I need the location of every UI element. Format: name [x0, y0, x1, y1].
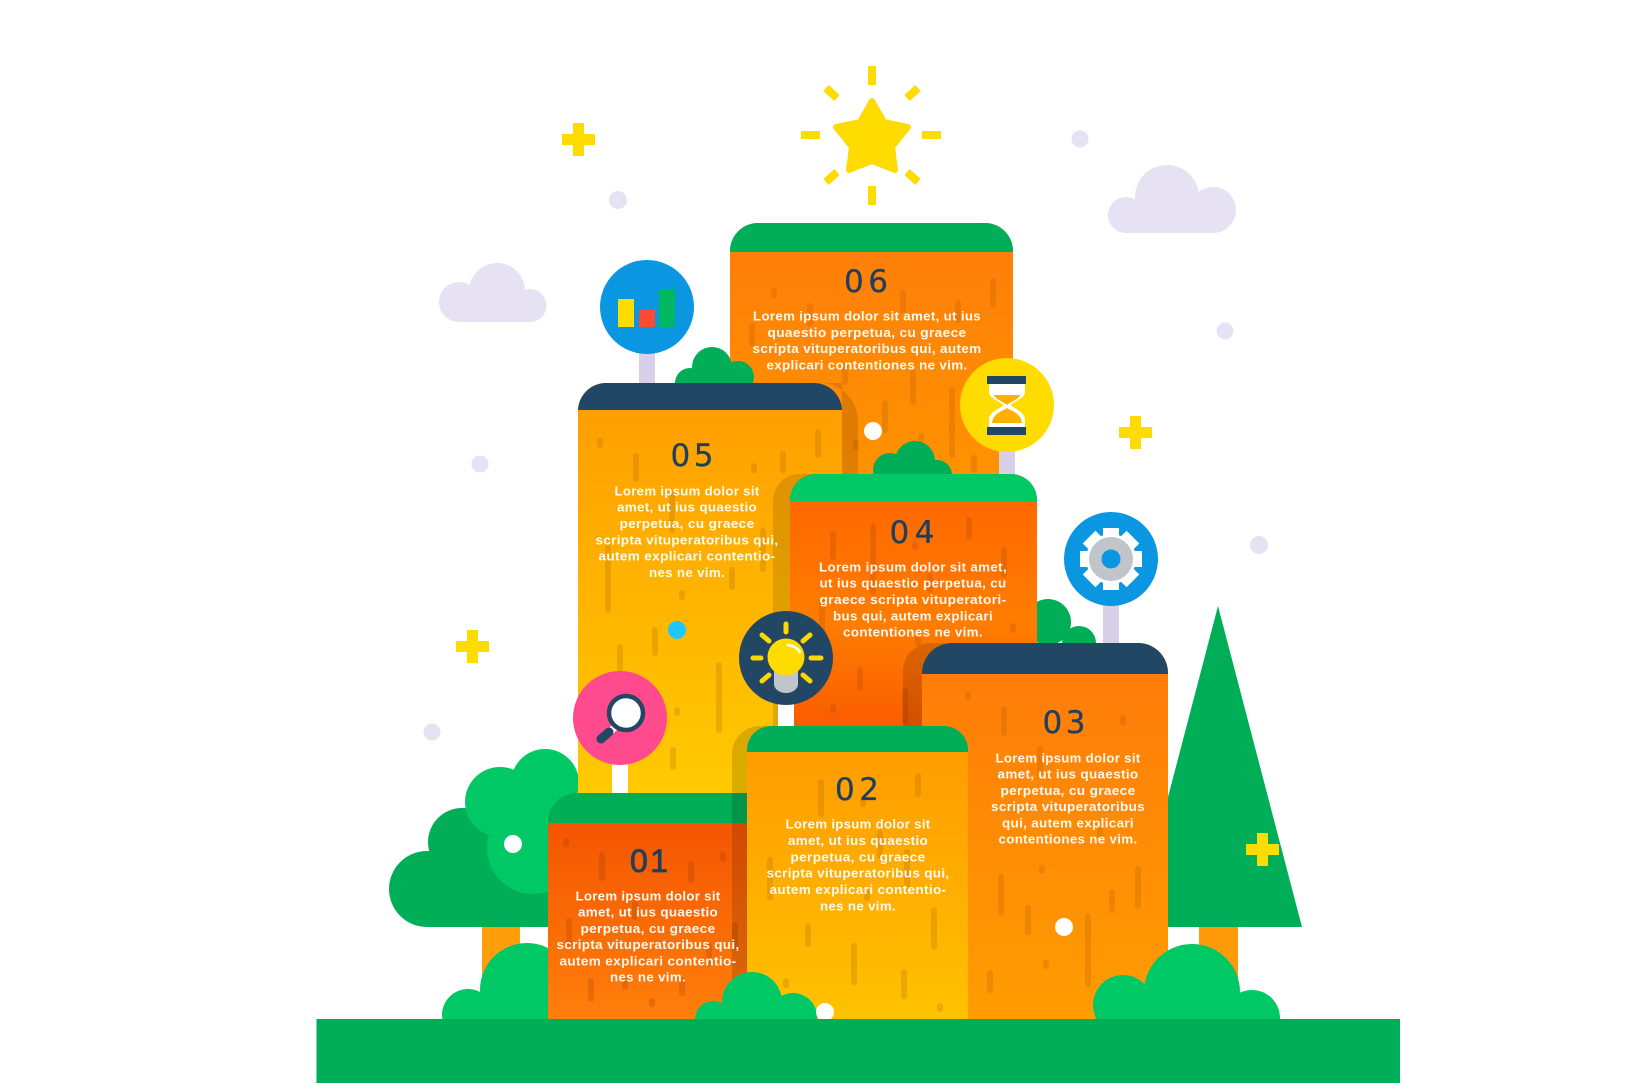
text block 04: 04: [890, 515, 934, 551]
text block 05: 05: [670, 438, 714, 474]
tree: left: [389, 749, 579, 1019]
shadow of panel 04: [773, 474, 815, 726]
text block 01: nes ne vim.: [610, 970, 686, 984]
icon: star with rays: [801, 66, 941, 205]
text block 03: 03: [1042, 705, 1086, 741]
text block 05: Lorem ipsum dolor sit: [614, 484, 760, 498]
dot: white near ground: [816, 1003, 834, 1021]
text block 06: quaestio perpetua, cu graece: [768, 326, 966, 340]
text block 01: 01: [630, 843, 668, 879]
panel 02: [747, 726, 968, 1019]
background dots: [424, 130, 1268, 740]
text block 03: qui, autem explicari: [1002, 816, 1134, 830]
panel 06: [730, 223, 1013, 476]
text block 04: ut ius quaestio perpetua, cu: [820, 576, 1006, 590]
text block 05: [596, 438, 778, 580]
shadow of panel 05: [820, 383, 858, 476]
text block 01: autem explicari contentio-: [560, 954, 736, 968]
panel 01: [548, 793, 748, 1019]
text block 02: autem explicari contentio-: [770, 883, 946, 897]
icon: gear: [1064, 512, 1158, 643]
text block 06: 06: [844, 264, 888, 300]
plus signs: [456, 123, 1152, 663]
text block 05: autem explicari contentio-: [598, 550, 776, 564]
text block 03: Lorem ipsum dolor sit: [996, 752, 1141, 766]
text block 03: amet, ut ius quaestio: [998, 768, 1139, 782]
panel 04: [790, 474, 1037, 726]
shadow of panel 02: [732, 726, 775, 1019]
icon: bar chart: [600, 260, 694, 383]
text block 05: perpetua, cu graece: [620, 517, 754, 531]
text block 01: Lorem ipsum dolor sit: [576, 890, 721, 904]
text block 03: contentiones ne vim.: [998, 832, 1138, 846]
text block 04: graece scripta vituperatori-: [820, 593, 1006, 607]
bush: behind panel 04: [873, 441, 952, 490]
icon: magnifier: [573, 671, 667, 793]
text block 04: contentiones ne vim.: [843, 626, 983, 640]
text block 01: [556, 843, 740, 984]
text block 06: [752, 264, 982, 372]
text block 02: perpetua, cu graece: [790, 850, 926, 864]
tree: right pine: [1134, 606, 1302, 1019]
bush: behind panel 05: [675, 347, 754, 398]
text block 03: perpetua, cu graece: [1000, 784, 1136, 798]
text block 01: scripta vituperatoribus qui,: [556, 938, 740, 952]
dot: blue on panel 05: [668, 621, 686, 639]
white dot on panel 06: [864, 422, 882, 440]
text block 04: Lorem ipsum dolor sit amet,: [819, 560, 1007, 574]
ground: [316, 1019, 1400, 1083]
text block 03: scripta vituperatoribus: [991, 800, 1145, 814]
text block 02: amet, ut ius quaestio: [788, 834, 928, 848]
text block 02: 02: [835, 772, 879, 808]
icon: hourglass: [960, 358, 1054, 476]
bush: centre front: [695, 972, 817, 1041]
shadow of panel 03: [903, 643, 945, 726]
text block 03: [991, 705, 1145, 846]
text block 05: amet, ut ius quaestio: [617, 500, 757, 514]
text block 02: nes ne vim.: [820, 900, 896, 914]
bark marks 03: [965, 692, 1141, 993]
bark marks 05: [597, 429, 821, 770]
text block 02: Lorem ipsum dolor sit: [786, 818, 931, 832]
bark marks 01: [563, 838, 738, 1007]
bush: behind panel 03: [1025, 599, 1096, 660]
cloud: left: [439, 263, 546, 322]
bark marks 02: [767, 773, 943, 1012]
bark marks 04: [819, 517, 1016, 725]
cloud: right: [1108, 165, 1236, 233]
dot: white on left tree: [504, 835, 522, 853]
plus sign on pine: [1246, 833, 1279, 866]
icon: light bulb: [739, 611, 833, 726]
text block 06: explicari contentiones ne vim.: [766, 358, 968, 372]
text block 02: [766, 772, 950, 914]
text block 02: scripta vituperatoribus qui,: [766, 866, 950, 880]
text block 04: [819, 515, 1007, 640]
text block 05: scripta vituperatoribus qui,: [596, 534, 778, 548]
text block 01: amet, ut ius quaestio: [578, 906, 718, 920]
text block 01: perpetua, cu graece: [580, 922, 716, 936]
text block 06: scripta vituperatoribus qui, autem: [752, 342, 982, 356]
bark marks 06: [749, 278, 996, 473]
text block 06: Lorem ipsum dolor sit amet, ut ius: [753, 310, 981, 324]
dot: white on panel 03: [1055, 918, 1073, 936]
text block 04: bus qui, autem explicari: [833, 610, 993, 624]
panel 03: [922, 643, 1168, 1019]
text block 05: nes ne vim.: [649, 566, 725, 580]
panel 05: [578, 383, 842, 793]
bush: behind left of panel 01: [442, 943, 574, 1041]
bush: right front: [1093, 944, 1280, 1046]
